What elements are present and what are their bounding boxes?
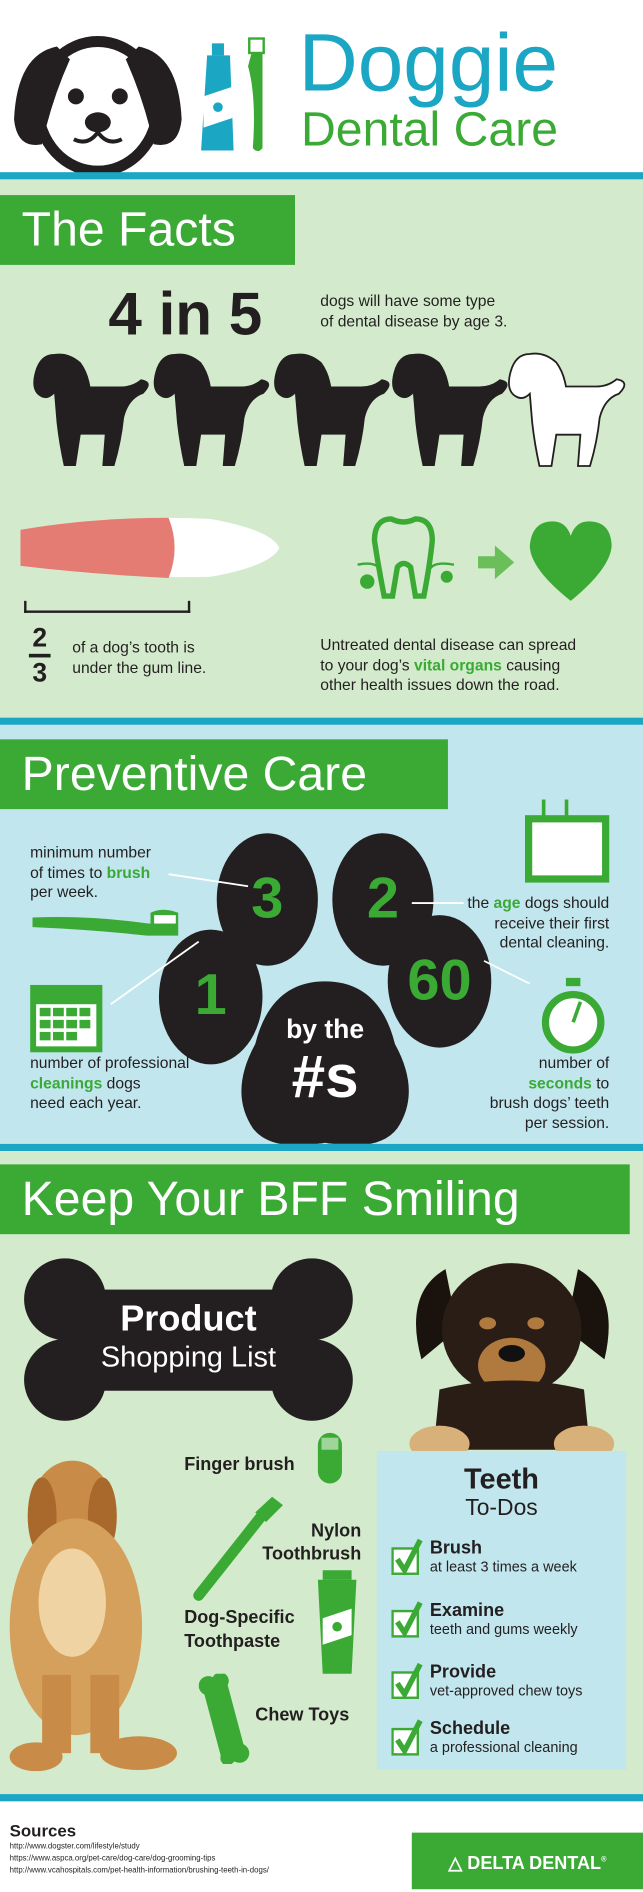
footer: sources: http://www.vcahospitals.com/pet-health-information/brushing-teeth-in-dogs/ [10,1866,269,1875]
to-do: brush: Brush [430,1538,482,1558]
icon: tooth under gum [20,518,280,578]
text: seconds per session: per session. [525,1113,609,1131]
title: Doggie [299,17,558,108]
text: vital organs: to your dog’s vital organs causing [320,656,560,674]
text: seconds per session: seconds to [528,1073,609,1092]
text: by the #s [286,1014,364,1110]
icon: cake [525,800,610,883]
text: under gum line: of a dog’s tooth is [72,638,195,656]
footer: sources [10,1821,269,1875]
footer: sources: Sources [10,1821,76,1840]
text: seconds per session [490,1054,610,1132]
text: age first cleaning: dental cleaning. [500,933,609,951]
to-do: schedule: a professional cleaning [430,1739,578,1756]
stat: 4 in 5: 4 in 5 [108,281,262,348]
photo: puppy [409,1263,614,1451]
icon: toothpaste tube [318,1570,356,1674]
text: vital organs [320,636,576,694]
bone: product shopping list [24,1258,353,1421]
text: vital organs: other health issues down the road. [320,676,560,694]
icon: toothbrush [32,910,178,936]
icon: calendar [30,984,102,1052]
logo: delta dental: △ DELTA DENTAL® [448,1853,606,1874]
product: toothpaste [184,1607,295,1652]
bracket [24,601,190,613]
icon: chew toy bone [198,1674,250,1764]
text: seconds per session: brush dogs’ teeth [490,1093,609,1111]
stat: 2: 2 [367,867,399,931]
text: vital organs: Untreated dental disease can spread [320,636,576,654]
text: by the #s: #s [292,1043,359,1110]
text: brush per week: of times to brush [30,863,150,881]
text: brush per week: per week. [30,883,98,901]
fraction 2/3: 2 3 [32,623,47,688]
product: nylon toothbrush: Toothbrush [262,1544,361,1564]
icon: finger brush [318,1432,342,1484]
to-do: examine: teeth and gums weekly [430,1621,578,1638]
text: brush per week [30,843,151,901]
footer: sources: https://www.aspca.org/pet-care/dog-care/dog-grooming-tips [10,1854,215,1863]
stat: 3: 3 [251,867,283,931]
heading: preventive care [0,739,448,809]
to-do: examine: Examine [430,1600,504,1621]
icons: five dog silhouettes [33,352,626,467]
heading: preventive care: Preventive Care [22,748,367,801]
product: nylon toothbrush: Nylon [311,1521,361,1541]
photo: golden retriever [10,1460,177,1772]
text: age first cleaning [467,893,610,951]
text: age first cleaning: receive their first [494,913,609,931]
to-do: brush [391,1538,577,1576]
icon: toothpaste and toothbrush [201,37,265,152]
panel: keep your BFF smiling [0,1151,643,1794]
heading: Keep Your BFF Smiling [22,1173,520,1226]
panel: teeth to-dos: To-Dos [465,1495,538,1521]
product: nylon toothbrush [262,1521,361,1564]
heading [0,1164,630,1234]
product: toothpaste: Toothpaste [184,1632,280,1652]
text: seconds per session: number of [539,1054,609,1072]
product: toothpaste: Dog-Specific [184,1607,295,1628]
logo: delta dental [412,1833,643,1889]
to-do: examine [391,1600,578,1638]
text: dogs dental disease [320,291,507,330]
icon: stopwatch [542,978,604,1054]
stat: 60: 60 [407,949,472,1013]
to-do: provide [391,1662,582,1700]
text: cleanings each year: number of professional [30,1054,189,1072]
to-do: provide: Provide [430,1662,496,1682]
text: brush per week: minimum number [30,843,151,861]
header: logo and title: Dental Care [301,104,558,157]
icon: dog face [14,36,182,172]
text: by the #s: by the [286,1014,364,1044]
text: dogs dental disease: of dental disease by age 3. [320,311,507,329]
icon: nylon toothbrush [193,1496,283,1601]
to-do: brush: at least 3 times a week [430,1558,577,1575]
text: dogs dental disease: dogs will have some type [320,291,495,309]
header: logo and title [14,17,558,172]
to-do: schedule: Schedule [430,1718,510,1739]
text: cleanings each year: need each year. [30,1093,142,1111]
fraction 2/3 [28,623,51,688]
text: cleanings each year [30,1054,189,1112]
panel: the facts [0,179,643,718]
bone: product shopping list: Product [120,1299,257,1339]
heading: the facts [0,195,295,265]
text: under gum line: under the gum line. [72,658,206,676]
panel: preventive care [0,725,643,1144]
paw print by the numbers [110,833,530,1144]
panel: teeth to-dos: Teeth [464,1463,539,1495]
heading: the facts: The Facts [22,203,236,256]
panel: teeth to-dos [377,1451,626,1770]
bone: product shopping list: Shopping List [101,1341,276,1374]
text: cleanings each year: cleanings dogs [30,1073,141,1092]
stat: 1: 1 [195,963,227,1027]
product: finger brush: Finger brush [184,1455,295,1475]
to-do: provide: vet-approved chew toys [430,1682,582,1699]
to-do: schedule [391,1718,578,1756]
footer: sources: http://www.dogster.com/lifestyle/study [10,1842,140,1851]
product: chew toys: Chew Toys [255,1705,349,1725]
text: age first cleaning: the age dogs should [467,893,609,912]
text: under gum line [72,638,206,676]
icon: tooth, arrow, heart [357,516,612,601]
